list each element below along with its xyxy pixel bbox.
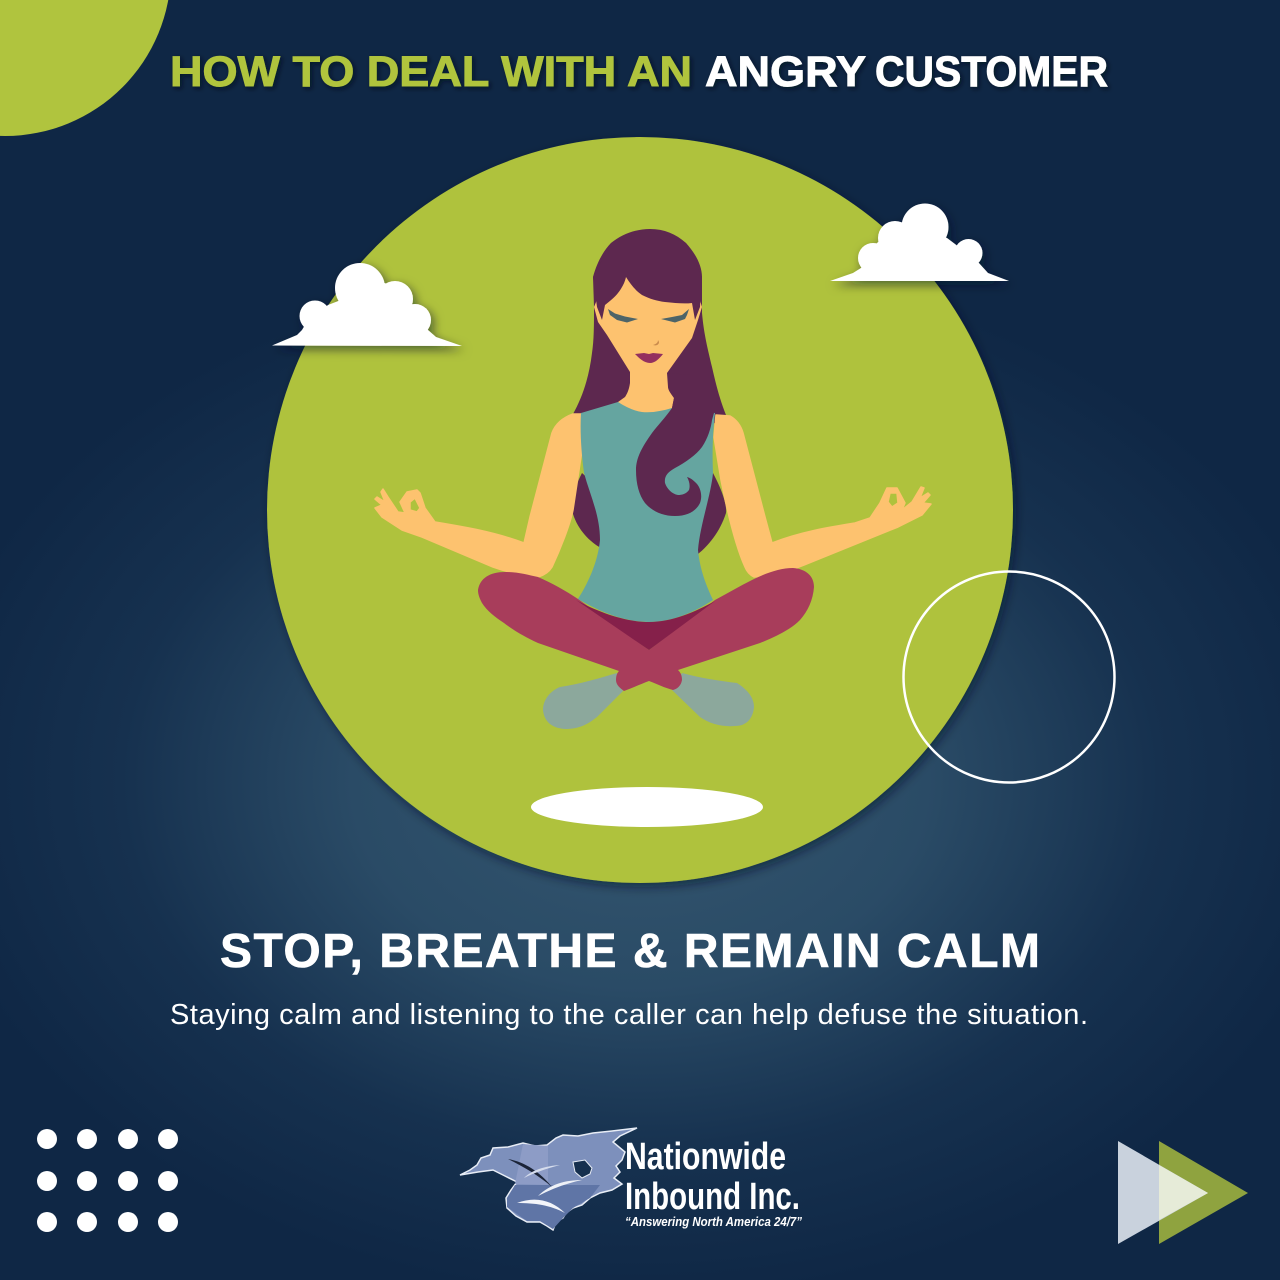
fringe bbox=[593, 229, 702, 320]
feet bbox=[543, 673, 754, 729]
title: HOW TO DEAL WITH AN bbox=[170, 48, 692, 96]
nose bbox=[653, 340, 659, 345]
logo text: “Answering North America 24/7” bbox=[625, 1214, 802, 1229]
long hair bbox=[573, 229, 726, 440]
cloud left bbox=[272, 263, 462, 346]
neck and face bbox=[594, 268, 702, 416]
logo text bbox=[625, 1136, 802, 1229]
double arrow bbox=[1118, 1141, 1248, 1244]
left arm and hand bbox=[375, 414, 584, 577]
back hair lower bbox=[572, 473, 726, 554]
logo text: Inbound Inc. bbox=[625, 1176, 800, 1218]
title bbox=[170, 48, 1108, 96]
front hair lock bbox=[636, 373, 714, 516]
large green circle bbox=[267, 137, 1013, 883]
logo text: Nationwide bbox=[625, 1136, 786, 1178]
crossed legs bbox=[478, 568, 814, 691]
meditating woman bbox=[375, 229, 931, 729]
closed eyes bbox=[608, 309, 689, 322]
arms bbox=[375, 414, 931, 577]
description: Staying calm and listening to the caller can help defuse the situation. bbox=[170, 999, 1088, 1031]
logo bbox=[460, 1128, 802, 1230]
cloud right bbox=[830, 204, 1009, 281]
right arm and hand bbox=[714, 415, 931, 577]
title: CUSTOMER bbox=[875, 48, 1108, 96]
logo map bbox=[460, 1128, 637, 1230]
shorts shadow bbox=[576, 600, 715, 650]
ground ellipse bbox=[531, 787, 763, 827]
title: ANGRY bbox=[705, 48, 866, 96]
corner circle bbox=[0, 0, 171, 136]
dot grid bbox=[37, 1129, 178, 1232]
heading: STOP, BREATHE & REMAIN CALM bbox=[220, 925, 1040, 978]
teal top bbox=[578, 402, 715, 622]
outlined circle bbox=[904, 572, 1114, 782]
lips bbox=[635, 353, 663, 363]
